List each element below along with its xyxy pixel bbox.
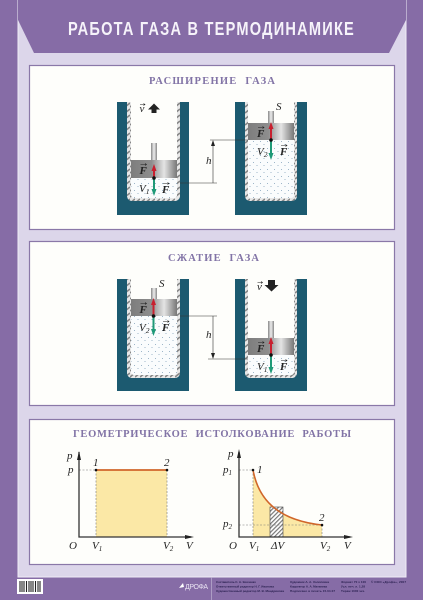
chart: isobaric work: V — [92, 540, 99, 552]
dimension h — [180, 140, 248, 183]
chart: isobaric work — [66, 450, 194, 553]
chart: isobaric work: 2 — [164, 457, 170, 469]
chart: isobaric work: p — [67, 464, 74, 476]
cylinder right, V2: F — [256, 128, 265, 140]
chart: isobaric work: 1 — [93, 457, 98, 469]
cylinder right, V1: 1 — [264, 365, 267, 374]
publisher logo: ДРОФА — [185, 584, 208, 591]
chart: isothermal work — [222, 448, 353, 553]
cylinder right, V1: v — [257, 281, 262, 293]
cylinder left, V1: v — [140, 103, 144, 115]
chart: isothermal work: V — [249, 540, 256, 552]
imprint: Корректор А. А. Матвеева — [290, 584, 327, 588]
imprint: Художественный редактор М. В. Мандрикова — [216, 589, 284, 593]
chart: isothermal work: 1 — [256, 545, 259, 553]
chart: isobaric work: 1 — [99, 545, 102, 553]
header banner — [18, 0, 406, 53]
cylinder left, V1: F — [161, 184, 170, 196]
cylinder left, V1: V — [139, 183, 146, 195]
imprint: Составитель С. А. Зинченко — [216, 580, 256, 584]
publisher logo — [179, 583, 208, 591]
cylinder left, V2: F — [161, 322, 170, 334]
chart: isothermal work: 1 — [228, 469, 232, 477]
chart: isobaric work: V — [186, 540, 194, 552]
imprint: Тираж 1000 экз. — [341, 589, 365, 593]
imprint: © ООО «Дрофа», 2007 — [371, 580, 406, 584]
chart: isothermal work: ΔV — [270, 540, 285, 552]
cylinder right, V2: V — [257, 146, 264, 158]
cylinder left, V2: 2 — [146, 326, 150, 335]
chart: isobaric work: p — [66, 450, 73, 462]
footer — [17, 577, 406, 600]
panel: geometric interpretation — [30, 420, 394, 564]
chart: isobaric work: 2 — [170, 545, 174, 553]
cylinder right, V2: 2 — [264, 150, 268, 159]
chart: isothermal work: 2 — [327, 545, 331, 553]
cylinder right, V2 — [235, 101, 307, 215]
cylinder right, V1: V — [257, 361, 264, 373]
imprint: Формат 70 x 100 — [341, 580, 366, 584]
cylinder left, V2: V — [139, 322, 146, 334]
imprint: Художник А. А. Холопкина — [290, 580, 329, 584]
chart: isothermal work: 2 — [319, 512, 325, 524]
chart: isothermal work: V — [320, 540, 327, 552]
cylinder right, V2: F — [279, 146, 288, 158]
cylinder left, V2 — [117, 278, 189, 391]
barcode — [17, 579, 43, 594]
heading: geometric interpretation: ГЕОМЕТРИЧЕСКОЕ ИСТОЛКОВАНИЕ РАБОТЫ — [73, 429, 352, 440]
heading: compression: СЖАТИЕ ГАЗА — [168, 253, 259, 264]
cylinder right, V1: F — [279, 361, 288, 373]
imprint: Усл. печ. л. 1,28 — [341, 584, 365, 588]
cylinder left, V1: 1 — [146, 187, 149, 196]
dimension h: h — [206, 155, 212, 167]
chart: isothermal work: p — [227, 448, 234, 460]
cylinder left, V2: S — [159, 278, 165, 290]
chart: isothermal work: 2 — [228, 523, 232, 531]
imprint: Ответственный редактор Н. Г. Иванова — [216, 584, 274, 588]
heading: expansion: РАСШИРЕНИЕ ГАЗА — [149, 76, 275, 87]
panel: expansion — [30, 66, 394, 230]
dimension h: h — [206, 329, 212, 341]
cylinder left, V2: F — [138, 304, 148, 316]
dimension h — [180, 316, 248, 359]
chart: isobaric work: O — [69, 540, 77, 552]
chart: isothermal work: 1 — [257, 464, 262, 476]
imprint — [216, 580, 406, 593]
chart: isothermal work: p — [223, 464, 228, 476]
title: РАБОТА ГАЗА В ТЕРМОДИНАМИКЕ — [68, 19, 355, 39]
cylinder left, V1 — [117, 102, 189, 215]
chart: isothermal work: p — [223, 518, 228, 530]
panel: compression — [30, 242, 394, 406]
cylinder left, V1: F — [138, 165, 148, 177]
chart: isobaric work: V — [163, 540, 170, 552]
chart: isothermal work: V — [344, 540, 352, 552]
imprint: Подписано в печать 15.04.07 — [290, 589, 335, 593]
cylinder right, V2: S — [276, 101, 282, 113]
chart: isothermal work: O — [229, 540, 237, 552]
cylinder right, V1: F — [256, 343, 265, 355]
cylinder right, V1 — [235, 279, 307, 391]
